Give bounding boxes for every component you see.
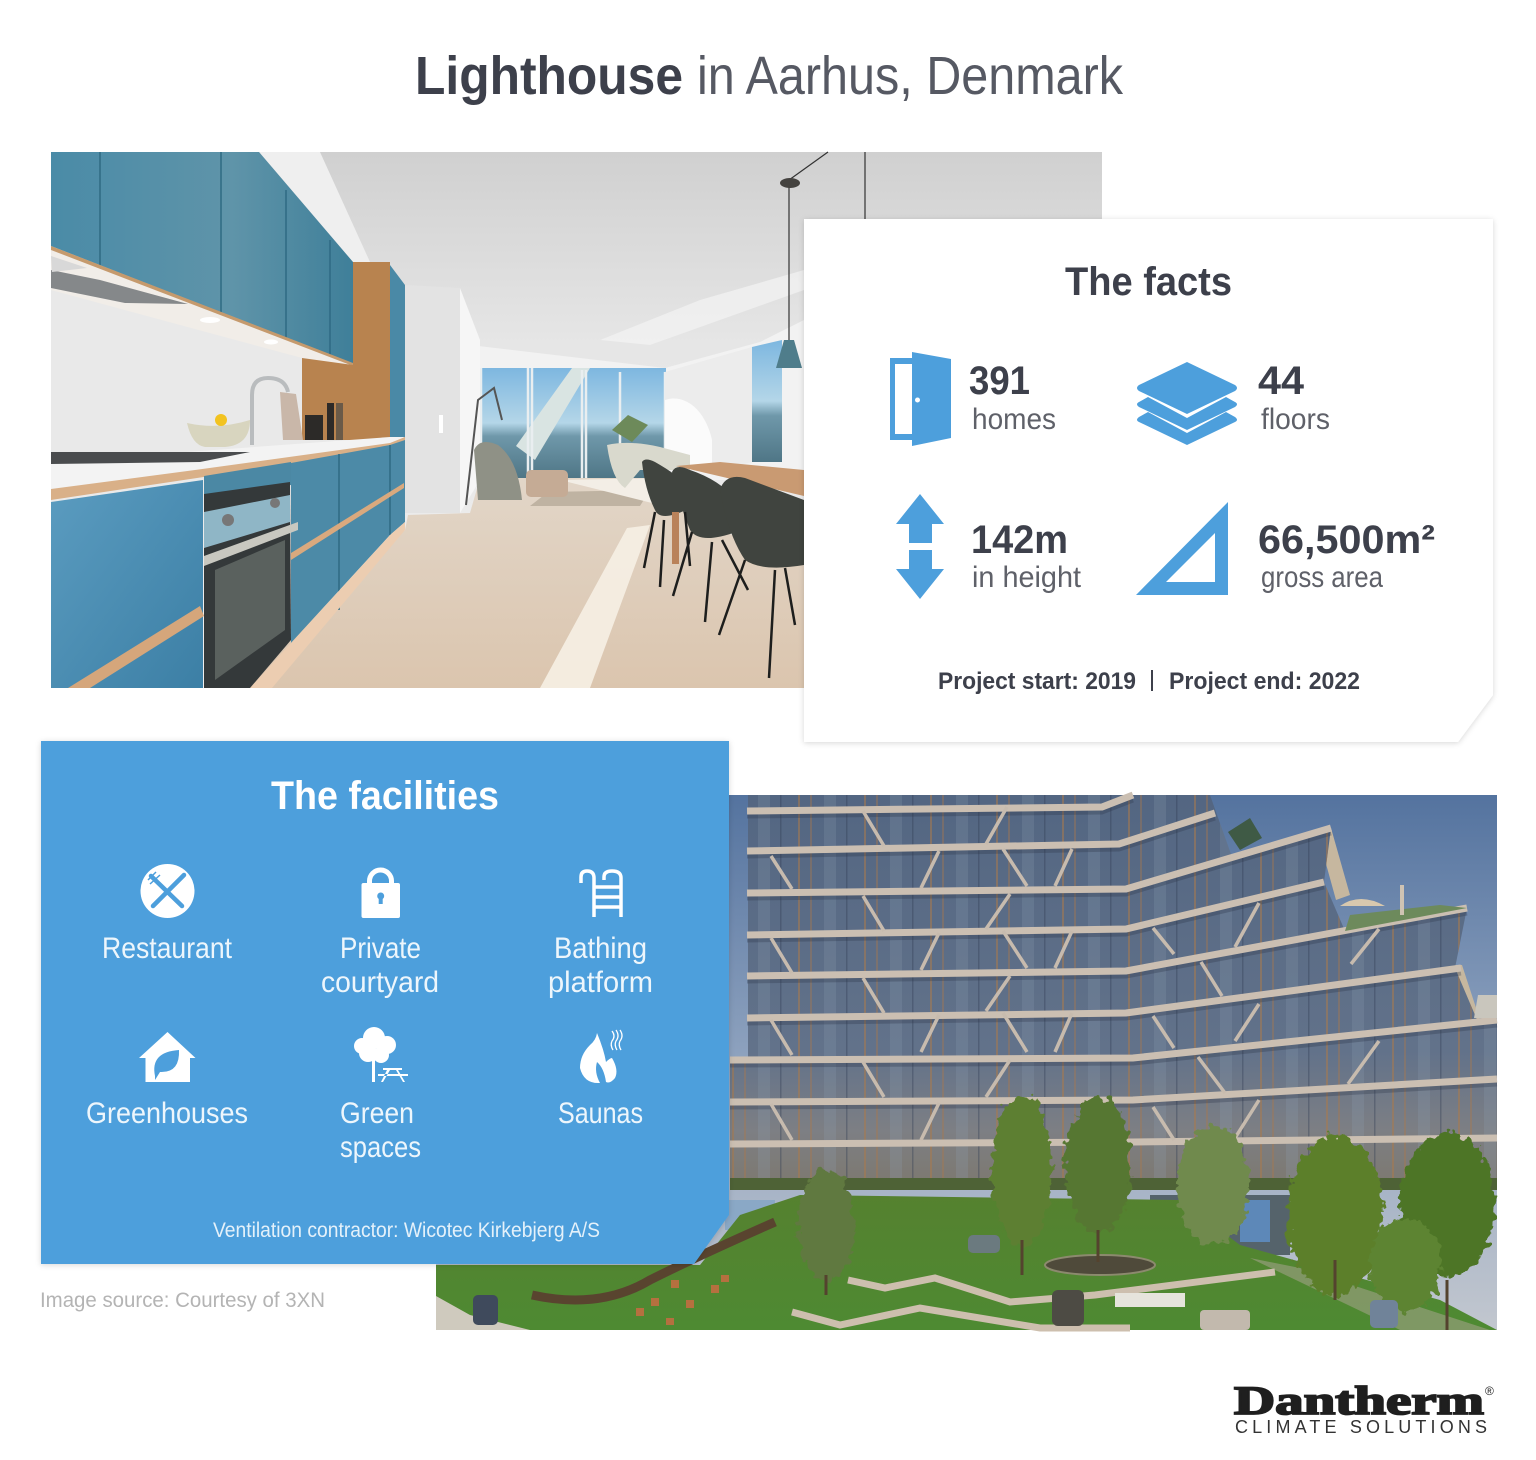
project dates [938, 668, 1360, 695]
icon: door [890, 352, 951, 446]
heading: the facts: The facts [1065, 260, 1232, 304]
photo: apartment kitchen interior [51, 152, 1102, 688]
garden lawn [436, 1195, 1497, 1330]
tall oak cabinet [302, 262, 390, 440]
label: green spaces: spaces [340, 1131, 421, 1164]
stat: floors: 44 [1258, 359, 1305, 403]
title: in Aarhus, Denmark [697, 46, 1124, 106]
concrete bench paths [792, 1272, 1275, 1328]
armchair, pouf and sofa [466, 388, 690, 505]
icon: pool ladder [581, 871, 621, 917]
stat: height: 142m [971, 518, 1068, 562]
sunlight streak [540, 525, 650, 688]
icon: tree and picnic table [354, 1027, 408, 1082]
icon: set square [1136, 502, 1228, 595]
stat: gross area: gross area [1261, 561, 1383, 594]
stat: gross area: 66,500m² [1258, 518, 1435, 562]
stat: homes: homes [972, 403, 1056, 436]
icon: greenhouse [139, 1032, 196, 1082]
heading: the facilities: The facilities [271, 774, 499, 818]
label: restaurant: Restaurant [102, 932, 233, 965]
under-cabinet lights [200, 317, 220, 323]
stumps [640, 1275, 725, 1325]
path [436, 1296, 530, 1330]
image source credit: Image source: Courtesy of 3XN [40, 1289, 325, 1312]
title: Lighthouse [415, 46, 683, 106]
oven [204, 482, 298, 688]
photo: Lighthouse building with garden [436, 795, 1497, 1330]
sandpit [1045, 1255, 1155, 1275]
picnic people [473, 1235, 1398, 1330]
logo: Dantherm Climate Solutions: ® [1485, 1384, 1494, 1398]
diagonal braces [771, 807, 1379, 1140]
icon: layers [1137, 362, 1237, 445]
water and pool [725, 1200, 775, 1230]
facade sand walls [1318, 828, 1350, 900]
plinth [250, 522, 405, 688]
stat: floors: floors [1261, 403, 1330, 436]
label: green spaces: Green [340, 1097, 414, 1130]
icon: height arrows [896, 494, 944, 599]
label: private courtyard: Private [340, 932, 421, 965]
project dates: Project end: 2022 [1169, 668, 1360, 695]
label: bathing platform: Bathing [554, 932, 647, 965]
label: bathing platform [548, 932, 653, 999]
roof terraces [1228, 818, 1497, 1018]
panel: the facts [804, 219, 1493, 742]
label: private courtyard [321, 932, 439, 999]
slab shadows [730, 800, 1497, 1107]
project dates: Project start: 2019 [938, 668, 1136, 695]
label: green spaces [340, 1097, 421, 1164]
building facade glass [730, 795, 1497, 1190]
bowl, tap and bottles [187, 378, 343, 447]
kitchen counter [51, 437, 405, 490]
dining chairs [642, 460, 804, 678]
right window [752, 340, 782, 462]
dining table [676, 462, 804, 496]
trees [798, 1094, 1495, 1311]
title [415, 46, 1124, 106]
label: saunas: Saunas [558, 1097, 643, 1130]
window with city view [480, 368, 666, 478]
label: bathing platform: platform [548, 966, 653, 999]
label: greenhouses: Greenhouses [86, 1097, 248, 1130]
floor slabs [730, 795, 1497, 1144]
logo: Dantherm Climate Solutions: Dantherm [1234, 1378, 1484, 1423]
ventilation contractor note: Ventilation contractor: Wicotec Kirkebjerg A/S [213, 1219, 600, 1242]
icon: restaurant [140, 864, 194, 918]
wood floor [240, 478, 804, 688]
lower cabinets [51, 440, 405, 688]
upper cabinets [51, 152, 353, 365]
label: private courtyard: courtyard [321, 966, 439, 999]
stat: gross area [1258, 518, 1435, 594]
pendant lamp [776, 152, 865, 368]
stat: homes [969, 359, 1056, 436]
pillar wall [405, 285, 460, 513]
cooker hood [51, 270, 188, 304]
stat: floors [1258, 359, 1330, 436]
logo: Dantherm Climate Solutions [1234, 1378, 1494, 1437]
stat: height [971, 518, 1082, 594]
panel: the facilities [41, 741, 729, 1264]
white backsplash wall [51, 286, 302, 465]
tall teal cabinet [390, 265, 405, 440]
tree trunks [826, 1230, 1447, 1330]
icon: sauna flame [580, 1030, 622, 1083]
stat: homes: 391 [969, 359, 1030, 403]
stat: height: in height [972, 561, 1082, 594]
icon: padlock [362, 870, 400, 918]
logo: Dantherm Climate Solutions: CLIMATE SOLUTIONS [1235, 1417, 1487, 1437]
wooden ramp [532, 1222, 775, 1300]
